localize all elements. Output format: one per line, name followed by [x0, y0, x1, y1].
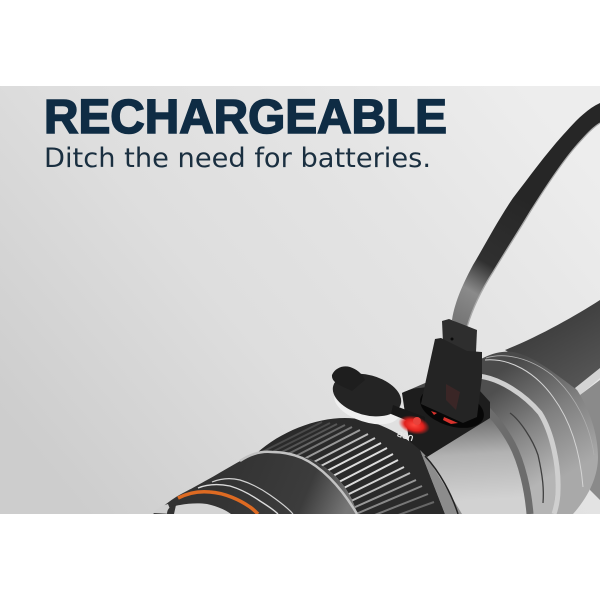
black control plate	[402, 380, 490, 457]
knurled focus ring	[258, 418, 445, 514]
head white line upper	[212, 479, 293, 514]
lens silver edge	[154, 504, 170, 514]
title: RECHARGEABLE	[44, 91, 447, 144]
right ribbed section	[580, 380, 600, 500]
flashlight head	[153, 452, 357, 514]
charging port opening	[420, 394, 484, 428]
inner barrel	[422, 418, 526, 514]
USB plug	[421, 319, 482, 423]
infographic canvas	[0, 86, 600, 514]
dark stripe	[490, 408, 534, 514]
silver bevel beside knurl	[420, 450, 462, 514]
silver bevel line on head	[240, 452, 357, 514]
thin groove	[510, 413, 543, 503]
collar barrel	[402, 352, 598, 514]
dark groove line	[425, 456, 458, 514]
collar middle band	[522, 440, 556, 514]
rubber port cap	[332, 366, 406, 424]
collar fine lines	[485, 356, 594, 487]
right silver strip	[575, 368, 600, 395]
silver stripe	[478, 376, 558, 514]
subtitle: Ditch the need for batteries.	[44, 143, 431, 174]
lens dark edge	[167, 505, 176, 514]
flashlight neck	[505, 300, 600, 392]
flashlight photo	[153, 103, 600, 526]
lens bezel	[167, 503, 231, 514]
red charging indicator	[398, 416, 430, 434]
charging cable	[452, 103, 600, 327]
head white line lower	[198, 485, 278, 514]
port label text: USB	[396, 429, 415, 443]
photo background	[0, 86, 600, 514]
orange band	[178, 492, 258, 514]
port red reflections	[431, 411, 458, 424]
